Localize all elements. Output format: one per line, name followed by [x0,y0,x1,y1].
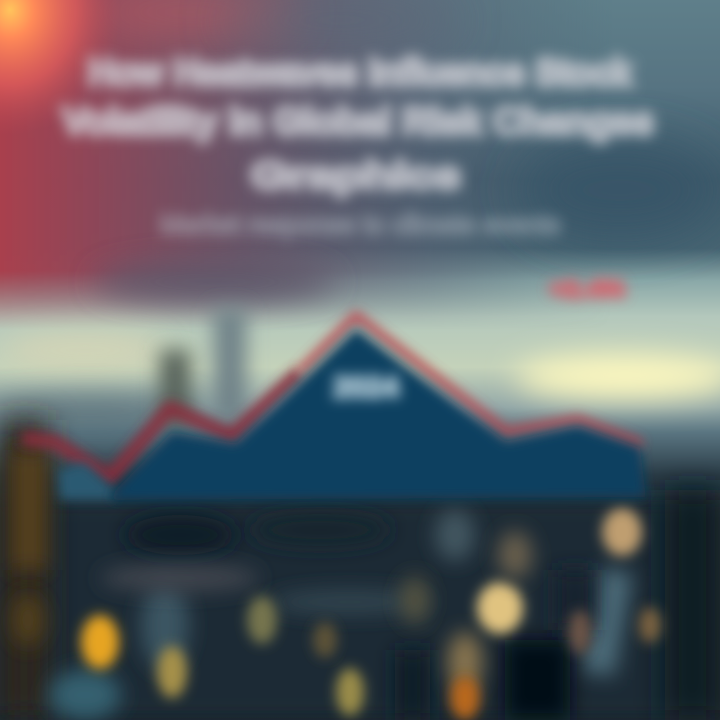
sun glow [0,0,120,135]
bokeh lights [12,508,661,720]
area chart [22,316,646,500]
title [62,52,654,197]
city lights foreground [0,420,720,720]
chart peak label: 2024 [333,371,399,404]
subtitle: Market response to climate events [160,209,560,239]
red callout label: +2.4% [549,276,625,303]
chart fill [112,328,646,500]
city skyline towers [160,308,246,425]
background: stormy sky [0,0,720,500]
title: Volatility in Global Risk Changes [62,101,654,143]
chart red line, right section [300,316,642,445]
title: Graphics [251,155,461,197]
chart red line, left section [22,372,300,478]
title: How Heatwaves Influence Stock [88,52,633,94]
chart lower-left lighter fill [58,462,115,500]
